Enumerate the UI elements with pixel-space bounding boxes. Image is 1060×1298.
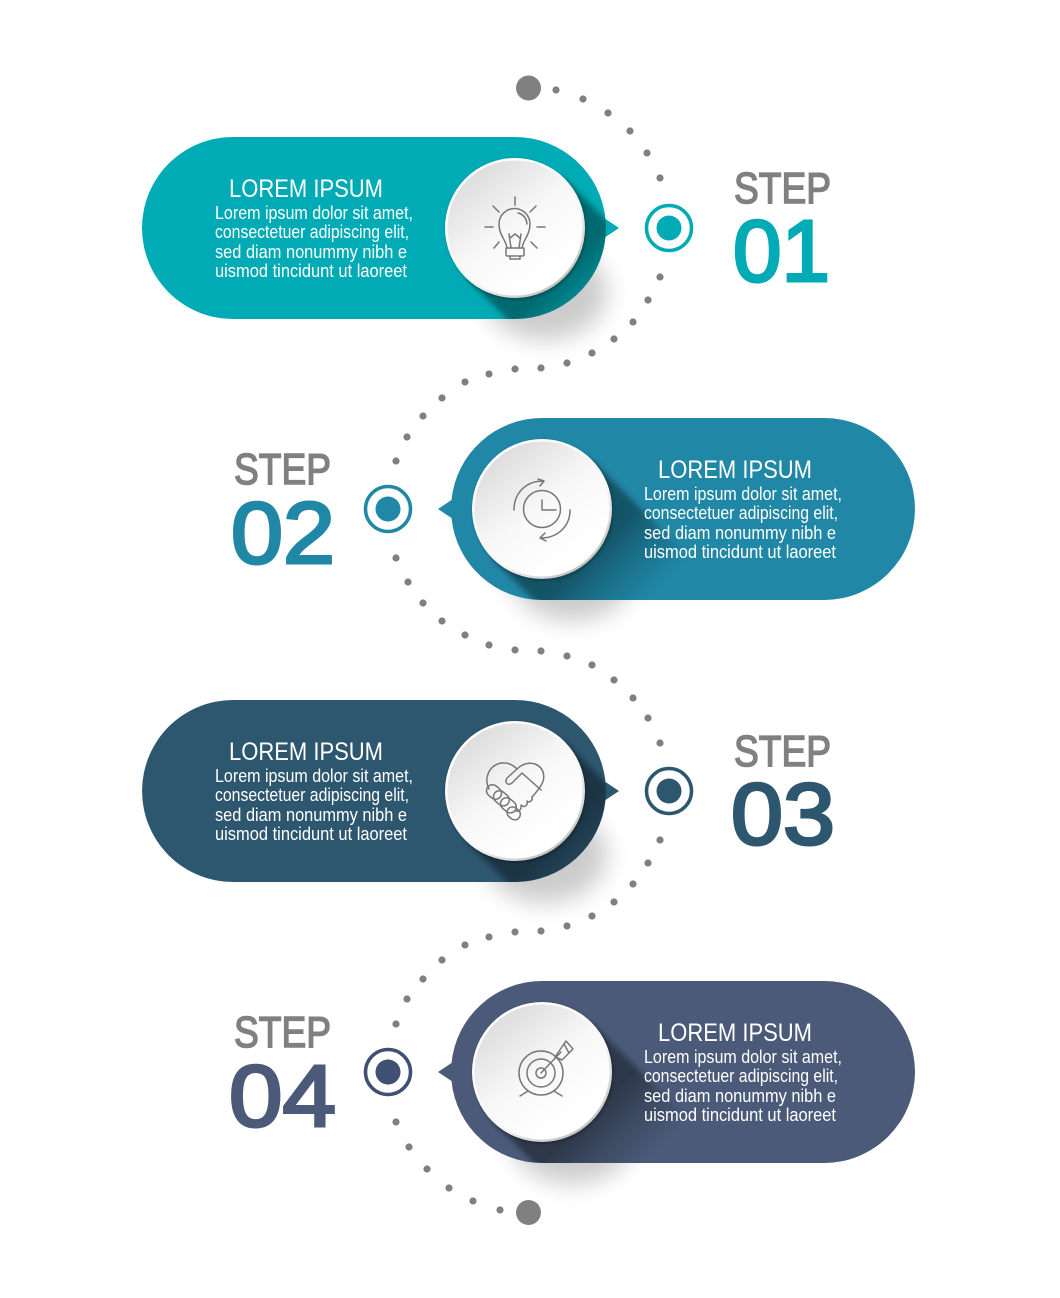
step 4 label: STEP xyxy=(234,1008,331,1057)
step 2 label xyxy=(231,445,335,582)
body text: sed diam nonummy nibh e xyxy=(215,242,407,262)
step 3 label: 03 xyxy=(731,766,835,863)
step 3 marker xyxy=(646,768,692,814)
body text: Lorem ipsum dolor sit amet, xyxy=(215,766,413,786)
dotted path connecting the steps xyxy=(392,76,664,1225)
body text: uismod tincidunt ut laoreet xyxy=(215,261,407,281)
body text: sed diam nonummy nibh e xyxy=(644,523,836,543)
circle badge with target icon xyxy=(472,1002,613,1144)
heading: LOREM IPSUM xyxy=(229,738,383,766)
body text xyxy=(215,766,413,844)
body text: uismod tincidunt ut laoreet xyxy=(215,824,407,844)
body text xyxy=(644,1047,842,1125)
circle badge with clock icon xyxy=(472,439,613,580)
step 4 label: 04 xyxy=(229,1048,336,1145)
body text: consectetuer adipiscing elit, xyxy=(215,222,409,242)
body text: uismod tincidunt ut laoreet xyxy=(644,542,836,562)
body text: uismod tincidunt ut laoreet xyxy=(644,1105,836,1125)
step 1 label: 01 xyxy=(733,203,830,300)
circle badge with handshake heart icon xyxy=(445,721,586,862)
step 3 label: STEP xyxy=(734,727,831,776)
heading: LOREM IPSUM xyxy=(658,1019,812,1047)
heading: LOREM IPSUM xyxy=(229,175,383,203)
body text: Lorem ipsum dolor sit amet, xyxy=(215,203,413,223)
panel: step 3 xyxy=(142,700,619,913)
panel: step 2 xyxy=(438,418,915,631)
step 2 label: 02 xyxy=(231,485,335,582)
step 1 label: STEP xyxy=(734,164,831,213)
body text: consectetuer adipiscing elit, xyxy=(215,785,409,805)
step 2 marker xyxy=(366,486,410,532)
heading: LOREM IPSUM xyxy=(658,456,812,484)
step 3 label xyxy=(731,727,835,863)
circle badge with lightbulb icon xyxy=(445,158,586,300)
step 4 marker xyxy=(366,1050,410,1094)
step 4 label xyxy=(229,1008,336,1145)
body text: sed diam nonummy nibh e xyxy=(644,1086,836,1106)
body text: sed diam nonummy nibh e xyxy=(215,805,407,825)
body text: consectetuer adipiscing elit, xyxy=(644,1066,838,1086)
step 2 label: STEP xyxy=(234,445,331,494)
body text xyxy=(644,484,842,562)
panel: step 4 xyxy=(438,981,915,1194)
panel: step 1 xyxy=(142,137,619,350)
body text: consectetuer adipiscing elit, xyxy=(644,503,838,523)
body text: Lorem ipsum dolor sit amet, xyxy=(644,484,842,504)
body text xyxy=(215,203,413,281)
body text: Lorem ipsum dolor sit amet, xyxy=(644,1047,842,1067)
step 1 marker xyxy=(646,206,692,250)
